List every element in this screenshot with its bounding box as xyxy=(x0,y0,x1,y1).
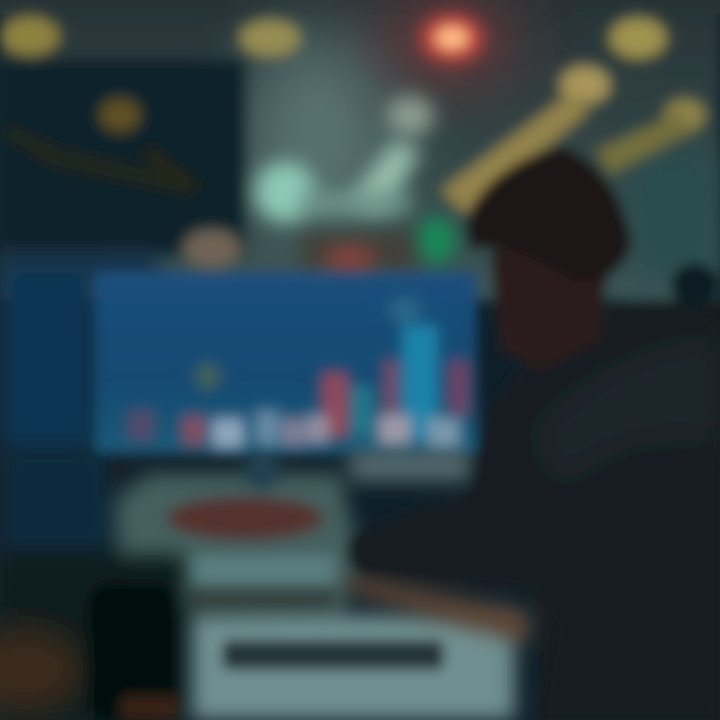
body xyxy=(346,300,720,720)
green-white chart glow xyxy=(255,96,455,270)
gold light streaks xyxy=(5,92,692,215)
red glow xyxy=(380,0,520,80)
hair xyxy=(465,145,632,282)
lower left foreground objects xyxy=(0,585,180,720)
keyboard xyxy=(222,640,444,670)
person silhouette xyxy=(345,145,720,720)
chart bars on the monitor xyxy=(128,297,470,448)
background wall xyxy=(0,0,720,300)
forearm skin xyxy=(345,575,530,645)
desk surface xyxy=(0,452,520,720)
dark panel upper left xyxy=(0,60,245,280)
ceiling lights xyxy=(0,16,706,268)
blue monitor xyxy=(0,270,477,555)
hands on desk xyxy=(167,450,323,539)
neck and face xyxy=(490,250,610,370)
shoulder sheen xyxy=(530,340,720,490)
